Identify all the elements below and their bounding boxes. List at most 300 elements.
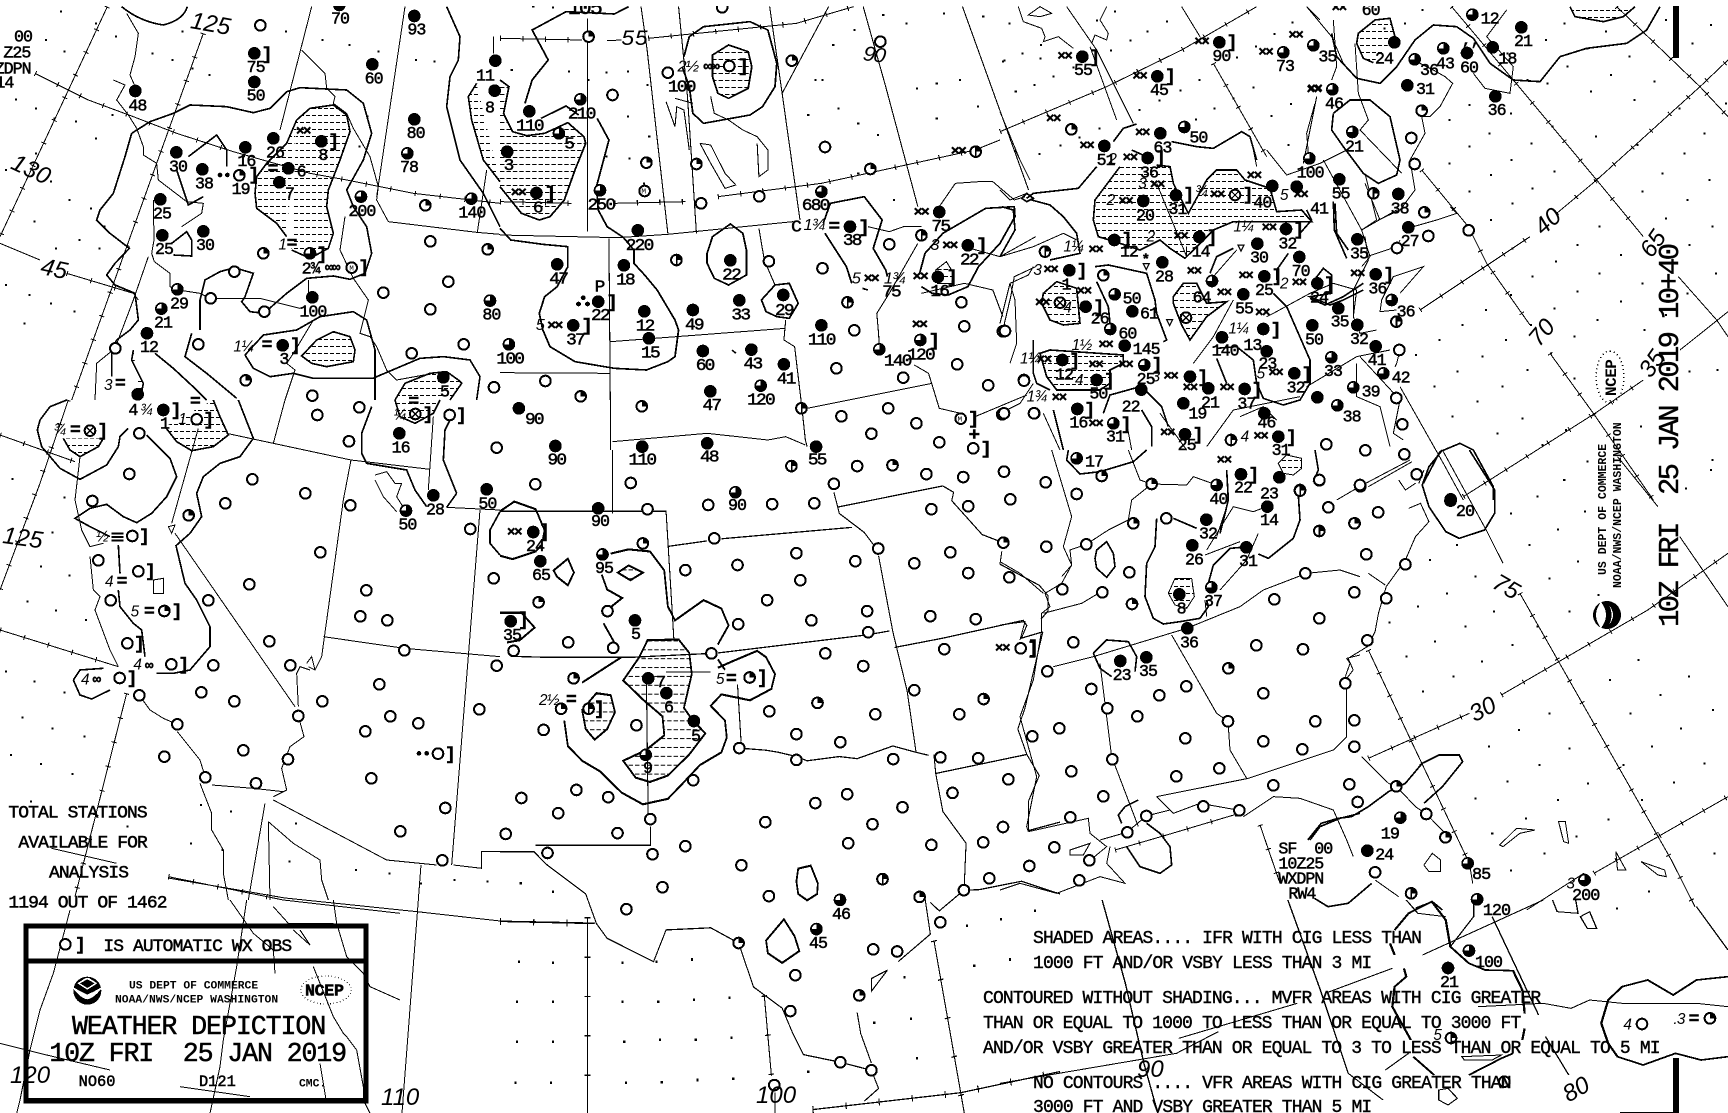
station plots: 12 — [636, 318, 655, 336]
station plots: 11 — [476, 68, 495, 87]
top margin — [0, 0, 1728, 6]
station plots — [998, 452, 1365, 886]
bottom right stations: M — [1501, 1079, 1505, 1087]
station plots: 60 — [1362, 2, 1380, 21]
station plots: ×× — [1217, 286, 1232, 302]
station plots: 26 — [266, 144, 284, 163]
graticule labels: 125 — [1, 522, 45, 555]
station plots: 36 — [1140, 164, 1158, 183]
station plots: 5 — [536, 317, 545, 334]
chart codes: NO60 — [79, 1073, 115, 1091]
graticule labels: 40 — [1529, 202, 1567, 241]
station plots: 25 — [1178, 437, 1196, 456]
station plots: = — [408, 393, 418, 413]
station plots: 2 — [1146, 229, 1156, 246]
station plots: = — [829, 216, 840, 237]
map region: north central — [496, 0, 1041, 470]
station plots: 49 — [685, 317, 704, 335]
station plots: ×× — [296, 124, 311, 140]
map region: southeast atlantic — [1308, 450, 1728, 921]
station plots: ] — [262, 45, 271, 65]
station plots: 28 — [426, 501, 444, 520]
station plots: + — [969, 425, 980, 446]
station plots: 14 — [1260, 512, 1279, 531]
station plots: 110 — [808, 332, 836, 350]
station plots: 31 — [1416, 81, 1435, 100]
station plots: 3 — [1152, 369, 1161, 386]
station plots: ×× — [1350, 267, 1365, 283]
station plots — [500, 460, 995, 1090]
station plots: 30 — [196, 237, 214, 256]
station plots: ] — [290, 337, 300, 357]
station plots: ×× — [1118, 357, 1133, 373]
south central station labels: 35 — [503, 627, 521, 646]
south central station labels: 7 — [656, 674, 665, 693]
station plots: ×× — [1046, 112, 1061, 128]
station plots: ] — [1121, 415, 1130, 435]
station plots: 75 — [931, 218, 951, 237]
station plots: 47 — [549, 271, 569, 289]
station plots: 35 — [1331, 314, 1349, 333]
IFR shaded areas — [1168, 455, 1302, 608]
station plots: ] — [97, 422, 107, 442]
station plots: ×× — [1332, 1, 1347, 17]
station plots: ] — [358, 259, 368, 279]
graticule labels: 125 — [189, 7, 233, 41]
station plots: 200 — [348, 203, 375, 222]
station plots: 2½ — [676, 59, 699, 76]
station plots: 32 — [1287, 380, 1305, 399]
station plots: 16 — [1069, 414, 1087, 433]
station plots: ] — [858, 217, 868, 238]
station plots: 22 — [1122, 399, 1140, 418]
station plots: 48 — [128, 98, 146, 117]
chart legend text: shaded areas, MVFR and VFR: NO CONTOURS .... VFR AREAS WITH CIG GREATER THAN — [1033, 1074, 1511, 1094]
station plots: ] — [1077, 262, 1086, 282]
station plots: 15 — [641, 345, 660, 363]
station plots: 29 — [775, 302, 794, 321]
station plots: = — [117, 573, 127, 593]
station plots: 7 — [285, 185, 294, 204]
station plots: ] — [1252, 381, 1261, 401]
south central station labels: 9 — [643, 760, 652, 779]
station plots: ×× — [1292, 276, 1307, 292]
south central station labels: 5 — [691, 728, 700, 747]
station plots: 25 — [1255, 282, 1273, 301]
station plots: 75 — [247, 59, 265, 78]
station plots: ×× — [1132, 69, 1147, 85]
graticule labels: 65 — [1635, 225, 1672, 262]
station plots: ×× — [1088, 242, 1103, 258]
station plots: = — [287, 234, 297, 254]
map region: northeast and atlantic — [1294, 1, 1728, 506]
station plots: 680 — [802, 197, 830, 216]
station plots: 1¼ — [233, 339, 254, 356]
station plots: 3 — [930, 237, 940, 254]
station plots: ½ — [96, 529, 109, 546]
station plots: ] — [423, 405, 432, 425]
station plots: 2¾ — [302, 260, 321, 279]
south central station labels: ] — [518, 611, 528, 631]
chart codes: CMC. — [299, 1079, 326, 1091]
station plots: ] — [134, 635, 144, 655]
station plots: ×× — [1043, 262, 1058, 278]
station plots: 18 — [616, 272, 635, 290]
station plots: ] — [1089, 48, 1099, 68]
station plots: 17 — [1085, 454, 1103, 473]
station plots — [1349, 494, 1600, 921]
station plots: 47 — [702, 397, 722, 416]
station plots: ×× — [951, 144, 966, 160]
south central station labels: 24 — [526, 538, 545, 557]
station plots: ¾ — [53, 422, 66, 439]
MVFR contours — [97, 7, 500, 400]
rotated chart title at right: 10Z FRI 25 JAN 2019 10+40 — [1654, 243, 1687, 627]
IFR shaded areas — [500, 45, 954, 283]
corner registration marks — [1620, 6, 1679, 1113]
rotated department credit: US DEPT OF COMMERCE — [1597, 444, 1610, 575]
station plots: ] — [581, 316, 591, 337]
station plots: ∞ — [145, 658, 154, 674]
station plots: 4 — [81, 671, 89, 688]
bottom right stations: 21 — [1440, 974, 1459, 993]
bottom right stations — [1433, 944, 1715, 1087]
IFR shaded areas — [132, 83, 500, 400]
station plots: ×× — [1077, 284, 1092, 300]
station plots: ×× — [511, 186, 526, 201]
station plots: ×× — [912, 270, 928, 285]
total stations note: AVAILABLE FOR — [18, 834, 148, 854]
station plots: ∞∞ — [325, 261, 341, 277]
station plots — [1294, 1, 1533, 506]
station plots: 25 — [153, 205, 171, 224]
station plots: 1¼ — [1020, 350, 1041, 367]
station plots: ] — [178, 656, 188, 676]
chart date: 10Z FRI 25 JAN 2019 — [49, 1040, 346, 1070]
station plots: ×× — [864, 272, 879, 287]
station plots: ×× — [942, 239, 958, 254]
station plots: ×× — [1262, 221, 1277, 237]
station plots: ×× — [1098, 337, 1113, 353]
bottom right stations: 4 — [1623, 1016, 1631, 1033]
icon: NCEP logo — [301, 976, 351, 1004]
station plots: ×× — [547, 319, 563, 334]
icon: rotated NCEP logo — [1596, 351, 1624, 403]
station plots: 13 — [1243, 337, 1261, 356]
station plots: 55 — [1235, 300, 1253, 319]
station plots: 50 — [398, 516, 416, 535]
station plots: 70 — [1292, 263, 1310, 282]
south central station labels: 5 — [631, 626, 640, 645]
station plots: 26 — [1091, 310, 1109, 329]
station plots: 22 — [591, 307, 610, 326]
station plots: 2 — [1106, 192, 1116, 209]
station plots: 42 — [1392, 369, 1410, 388]
station plots: ] — [1207, 229, 1216, 249]
station plots: ×× — [1238, 268, 1253, 284]
station plots: 18 — [1498, 50, 1516, 69]
chart legend text: shaded areas, MVFR and VFR: SHADED AREAS.... IFR WITH CIG LESS THAN — [1033, 929, 1421, 949]
station plots: 37 — [1237, 395, 1255, 414]
station plots: 21 — [1201, 394, 1220, 413]
station plots: = — [190, 393, 200, 413]
station plots: 220 — [626, 237, 654, 256]
station plots: 38 — [1343, 409, 1361, 428]
station plots: ×× — [1307, 82, 1322, 98]
south central station labels: ] — [594, 700, 604, 720]
station plots: 4 — [133, 656, 141, 673]
IFR shaded areas — [582, 565, 705, 782]
station plots: ] — [929, 331, 938, 352]
station plots: 41 — [777, 371, 796, 389]
MVFR contours — [1300, 7, 1660, 500]
station plots: ] — [1093, 299, 1103, 319]
south central station labels: 6 — [664, 699, 673, 718]
station plots: ] — [1122, 231, 1131, 251]
station plots: 12 — [1120, 244, 1138, 263]
station plots: 4 — [1063, 300, 1071, 317]
station plots: 1½ — [1072, 337, 1093, 354]
station plots: 32 — [1350, 331, 1368, 350]
station plots: 140 — [458, 204, 485, 223]
station plots: 31 — [1168, 201, 1187, 220]
station plots: 8 — [1177, 600, 1186, 619]
station plots: 31 — [1272, 442, 1291, 461]
station plots: = — [268, 160, 278, 180]
map region: midwest and great lakes — [999, 149, 1397, 461]
station plots: ×× — [1035, 296, 1050, 312]
station plots: ¼ — [393, 407, 406, 424]
station plots: 39 — [1362, 384, 1380, 403]
IFR shaded areas — [1357, 7, 1635, 63]
station plots: 45 — [1150, 82, 1168, 101]
station plots: 43 — [1436, 55, 1454, 74]
station plots: ] — [1197, 368, 1207, 388]
station plots: 140 — [1212, 343, 1239, 362]
station plots: ] — [545, 184, 554, 205]
south central station labels: ] — [757, 669, 767, 689]
station plots: 22 — [722, 267, 741, 285]
department credit: US DEPT OF COMMERCE — [129, 981, 258, 993]
station plots: 1 — [1062, 276, 1072, 295]
station plots: 3 — [1138, 175, 1147, 192]
station plots: ] — [1286, 429, 1296, 449]
south central station labels: 45 — [809, 935, 827, 954]
station plots: 16 — [392, 439, 410, 458]
station plots: 33 — [1324, 363, 1342, 382]
station plots: 8 — [485, 99, 494, 118]
station plots: 1 — [160, 415, 170, 434]
station plots: 31 — [1106, 429, 1125, 448]
station plots: ] — [1183, 186, 1193, 206]
station plots: 70 — [331, 10, 349, 29]
station plots: 50 — [247, 88, 265, 107]
station plots: 55 — [621, 26, 648, 50]
station plots: 50 — [1123, 290, 1141, 309]
station plots: 60 — [365, 70, 383, 89]
station plots: 21 — [154, 314, 173, 333]
map region: bottom right lines — [1000, 900, 1728, 1113]
station plots: 46 — [1257, 414, 1275, 433]
station plots: 19 — [232, 181, 250, 200]
station plots: 250 — [587, 197, 616, 215]
station plots: 23 — [1113, 667, 1131, 686]
station plots: 16 — [930, 283, 950, 302]
station plots: ] — [127, 669, 136, 689]
MVFR contours — [500, 502, 818, 963]
station plots: 3 — [104, 377, 113, 394]
station plots: ×× — [912, 318, 927, 333]
surface analysis station count block: WXDPN — [1278, 870, 1323, 889]
station plots: 50 — [1189, 130, 1207, 149]
station plots: 30 — [1250, 250, 1268, 269]
station plots: 64 — [1193, 290, 1212, 309]
station plots: 145 — [1133, 341, 1160, 360]
surface analysis station count block: 10Z25 — [1278, 855, 1323, 874]
graticule labels: 120 — [10, 1062, 51, 1089]
station plots: 3 — [504, 157, 514, 176]
station plots: ] — [1243, 186, 1252, 206]
graticule labels: 90 — [1137, 1056, 1164, 1083]
station plots: ] — [737, 56, 747, 77]
station plots: ] — [1069, 352, 1079, 372]
station plots: ×× — [1258, 45, 1273, 61]
graticule labels: 80 — [1558, 1071, 1595, 1108]
station plots: 41 — [1310, 200, 1329, 219]
station plots: 55 — [1332, 185, 1350, 204]
station plots: ] — [1383, 266, 1393, 286]
south central station labels — [503, 497, 1038, 1109]
surface chart code at top left — [0, 29, 32, 93]
station plots: ×× — [1217, 453, 1232, 469]
title: weather depiction: WEATHER DEPICTION — [72, 1013, 325, 1043]
surface analysis station count block: SF 00 — [1278, 840, 1332, 859]
station plots: 31 — [1239, 553, 1258, 572]
chart legend text: shaded areas, MVFR and VFR: CONTOURED WITHOUT SHADING... MVFR AREAS WITH CIG GREATER — [983, 989, 1541, 1009]
graticule labels: 45 — [38, 253, 71, 285]
station plots: 25 — [155, 241, 173, 260]
station plots: ] — [248, 166, 258, 186]
graticule labels: 70 — [1523, 313, 1561, 352]
station plots: 6 — [533, 200, 543, 218]
station plots: 61 — [1140, 305, 1159, 324]
station plots: ] — [172, 603, 181, 623]
station plots: ] — [1104, 372, 1114, 392]
station plots: ×× — [1037, 352, 1052, 368]
map region: south central — [500, 450, 1060, 1113]
station plots: 35 — [1318, 49, 1336, 68]
station plots: 4 — [1075, 372, 1083, 389]
station plots: 50 — [1305, 331, 1323, 350]
station plots: ] — [1272, 268, 1281, 288]
station plots: ×× — [1187, 264, 1202, 280]
station plots: 36 — [1420, 62, 1438, 81]
IFR shaded areas — [1040, 165, 1312, 390]
station plots: 29 — [170, 295, 188, 314]
station plots: ] — [1227, 34, 1236, 54]
station plots: 24 — [1310, 290, 1329, 309]
station plots: ] — [968, 409, 978, 430]
station plots: ] — [1271, 321, 1280, 341]
station plots: 100 — [1297, 164, 1324, 183]
station plots: 140 — [884, 353, 912, 371]
surface analysis station count block: RW4 — [1288, 885, 1316, 904]
station plots: 120 — [747, 392, 775, 410]
station plots: 38 — [195, 175, 213, 194]
station plots: 32 — [1199, 525, 1217, 544]
station plots: ∞∞ — [704, 60, 720, 75]
station plots: 36 — [1488, 102, 1506, 121]
station plots: M — [349, 265, 353, 273]
station plots: ] — [606, 292, 616, 313]
automatic observation key: ] — [75, 936, 85, 956]
station plots: M — [957, 417, 963, 424]
station plots: 24 — [1375, 846, 1394, 865]
bottom right stations: = — [1689, 1010, 1699, 1030]
station plots: ] — [1027, 640, 1037, 660]
station plots: 23 — [1258, 355, 1276, 374]
station plots: 73 — [1276, 58, 1294, 77]
station plots: 78 — [400, 159, 418, 178]
station plots: 25 — [1137, 371, 1155, 390]
station plots: 3 — [1033, 262, 1042, 279]
station plots: ] — [317, 245, 326, 265]
department credit — [115, 981, 278, 1007]
station plots: 50 — [478, 495, 496, 514]
south central station labels: ×× — [995, 641, 1010, 657]
station plots: 38 — [843, 232, 862, 251]
MVFR contours — [37, 400, 500, 699]
south central station labels: ] — [1028, 639, 1038, 659]
station plots: ×× — [1088, 416, 1103, 432]
station plots — [999, 149, 1329, 461]
south central station labels: 90 — [591, 513, 609, 532]
station plots: 21 — [1514, 33, 1533, 52]
station plots: 120 — [1483, 902, 1511, 921]
station plots: 4 — [105, 574, 113, 591]
MVFR contours — [1067, 450, 1360, 873]
MVFR contours — [500, 7, 1015, 370]
station plots: 50 — [1089, 385, 1107, 404]
station plots: ×× — [1247, 168, 1262, 184]
station plots: ] — [203, 411, 213, 431]
south central station labels: = — [566, 691, 576, 711]
station plots: 1¼ — [1233, 219, 1254, 236]
station plots: 120 — [907, 347, 935, 365]
station plots: 27 — [1401, 233, 1419, 252]
station plots: 19 — [1188, 405, 1206, 424]
chart legend text: shaded areas, MVFR and VFR — [983, 929, 1660, 1113]
station plots: ×× — [1118, 194, 1133, 210]
station plots: 100 — [299, 304, 326, 323]
station plots: ▽ — [1143, 260, 1151, 274]
station plots: ] — [1155, 149, 1165, 169]
station plots: 35 — [1139, 663, 1157, 682]
station plots: ×× — [1183, 381, 1198, 397]
automatic observation key: IS AUTOMATIC WX OBS — [103, 937, 291, 957]
graticule labels: 75 — [1488, 569, 1525, 606]
chart codes — [79, 1073, 326, 1091]
station plots — [496, 0, 1040, 470]
station plots: ×× — [1135, 126, 1150, 142]
station plots: ×× — [1163, 369, 1178, 385]
chart codes: D121 — [199, 1073, 236, 1091]
station plots: 12 — [1481, 10, 1499, 29]
map region: northwest — [0, 0, 502, 403]
station plots: 36 — [1180, 634, 1198, 653]
station plots: ] — [1324, 275, 1334, 295]
station plots: 55 — [1074, 62, 1092, 81]
